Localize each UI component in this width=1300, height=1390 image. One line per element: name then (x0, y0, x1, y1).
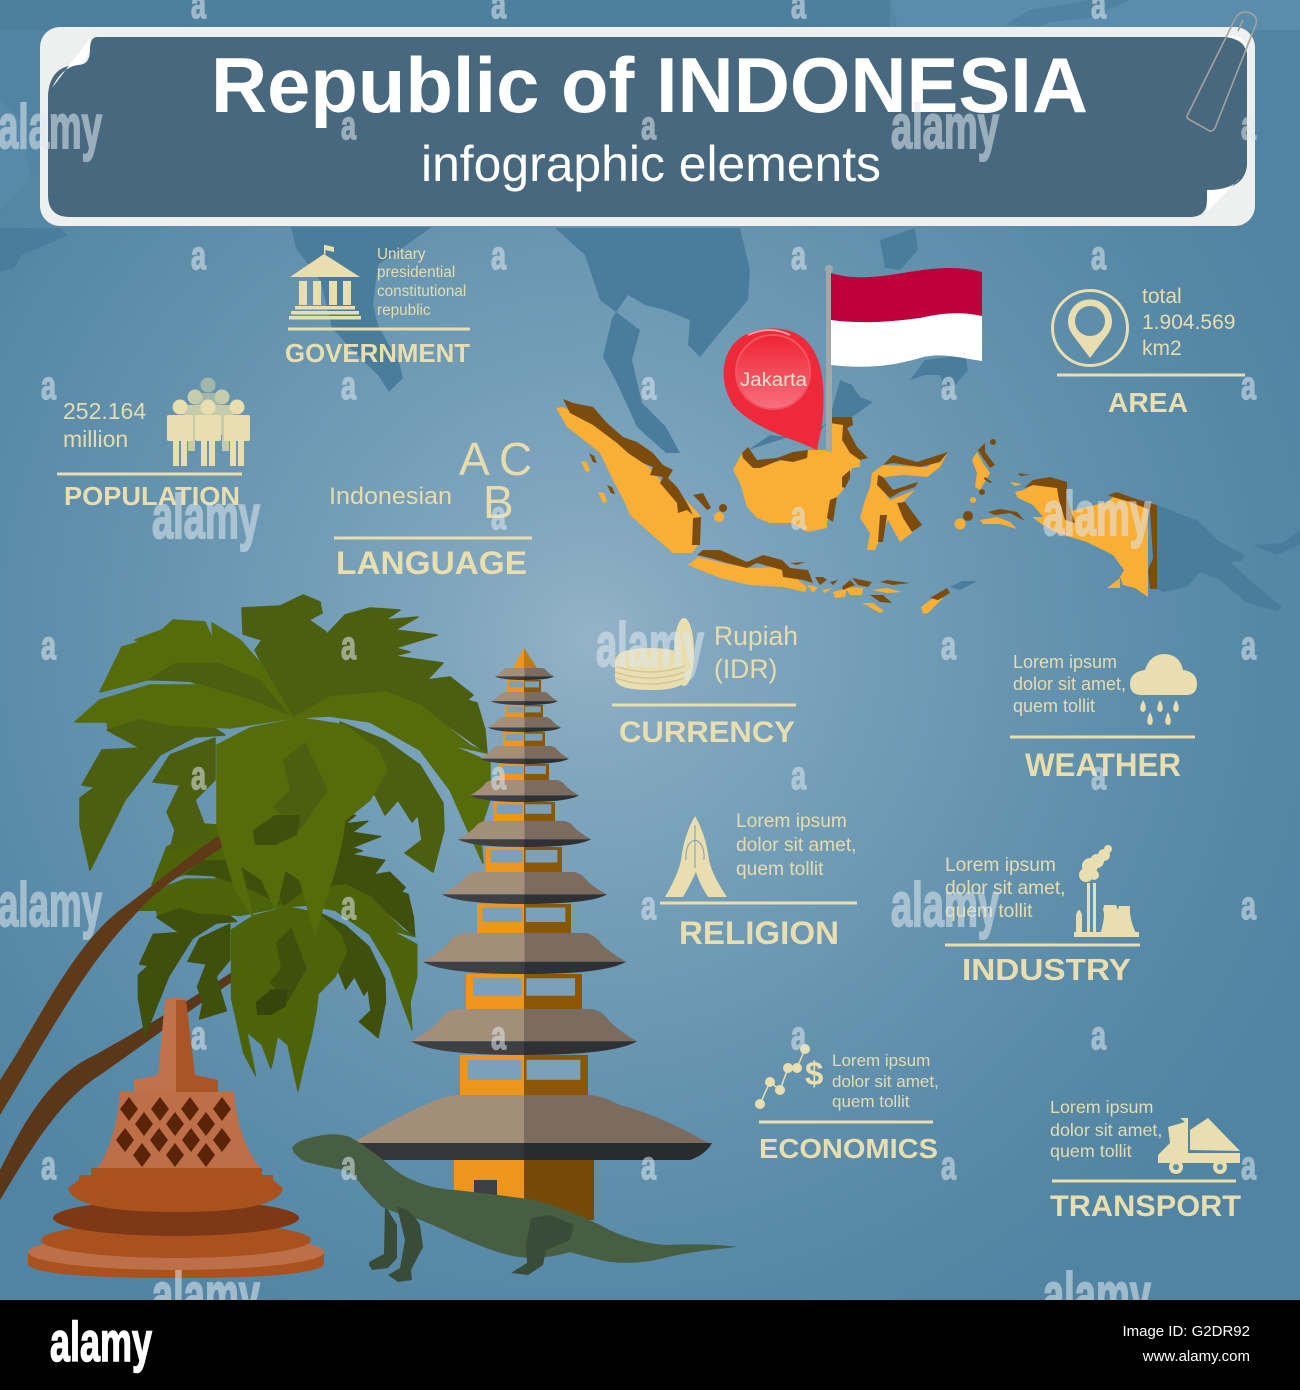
block: area (1052, 285, 1245, 418)
watermark pattern: a (341, 364, 357, 408)
block: language: B (483, 476, 514, 528)
block: religion: quem tollit (736, 859, 824, 880)
watermark pattern: alamy (891, 871, 999, 940)
watermark pattern: a (1091, 754, 1107, 798)
footer bar (0, 1300, 1300, 1390)
block: language: C (499, 433, 532, 485)
footer bar: www.alamy.com (1142, 1348, 1250, 1365)
icon: factory (1074, 845, 1139, 937)
watermark pattern: a (791, 1014, 807, 1058)
watermark pattern: a (191, 234, 207, 278)
subtitle: infographic elements (421, 136, 881, 192)
icon: people group (167, 378, 250, 466)
upper palm tree (0, 595, 490, 1115)
block: government: constitutional (377, 283, 466, 300)
icon: government building (289, 245, 361, 320)
icon: growth chart with dollar: $ (805, 1055, 823, 1092)
block: area: 1.904.569 (1142, 311, 1235, 334)
block: population (57, 378, 250, 511)
watermark pattern: a (191, 1014, 207, 1058)
header banner (40, 27, 1255, 226)
icon: paper clip (1187, 12, 1256, 131)
watermark pattern: a (791, 494, 807, 538)
block: government: Unitary (377, 246, 426, 263)
world map silhouettes (0, 0, 1300, 611)
watermark pattern: a (1241, 1144, 1257, 1188)
icon: dump truck (1158, 1118, 1240, 1174)
block: transport: TRANSPORT (1050, 1190, 1241, 1223)
watermark pattern: a (941, 624, 957, 668)
map of Indonesia (556, 399, 1157, 614)
watermark pattern: a (41, 624, 57, 668)
watermark pattern: a (341, 104, 357, 148)
block: currency: CURRENCY (619, 716, 795, 749)
block: economics: Lorem ipsum (832, 1051, 930, 1070)
block: language: A (459, 433, 490, 485)
watermark pattern: alamy (1043, 1261, 1151, 1330)
block: industry: INDUSTRY (962, 952, 1131, 987)
block: government: presidential (377, 264, 455, 281)
block: economics: dolor sit amet, (832, 1072, 939, 1091)
block: population: million (63, 426, 128, 452)
block: population: POPULATION (64, 481, 240, 511)
icon: rain cloud (1130, 654, 1197, 725)
watermark pattern: alamy (0, 93, 102, 162)
watermark pattern: a (41, 364, 57, 408)
watermark pattern: alamy (596, 611, 704, 680)
block: currency (612, 618, 798, 749)
watermark pattern: a (1241, 104, 1257, 148)
pin: Jakarta: Jakarta (740, 370, 807, 391)
icon: growth chart with dollar (755, 1044, 823, 1109)
watermark pattern: alamy (1043, 480, 1151, 549)
watermark pattern: a (341, 884, 357, 928)
watermark pattern: a (791, 234, 807, 278)
icon: praying hands (665, 816, 727, 897)
block: area: AREA (1108, 387, 1188, 418)
lower palm tree (0, 802, 417, 1200)
block: language (329, 433, 532, 581)
block: weather (1010, 652, 1197, 783)
footer logo: alamy (50, 1310, 152, 1373)
block: economics: quem tollit (832, 1092, 910, 1111)
flag of Indonesia (825, 265, 982, 452)
watermark pattern: a (641, 884, 657, 928)
stupa (28, 998, 324, 1278)
footer bar: Image ID: G2DR92 (1122, 1323, 1250, 1340)
watermark pattern: a (941, 1144, 957, 1188)
block: transport: Lorem ipsum (1050, 1097, 1153, 1117)
pin: Jakarta (724, 328, 824, 450)
watermark pattern: a (641, 104, 657, 148)
block: weather: Lorem ipsum (1013, 652, 1117, 672)
watermark pattern: a (491, 1014, 507, 1058)
block: industry: quem tollit (945, 901, 1033, 922)
block: religion: dolor sit amet, (736, 835, 857, 856)
block: industry: dolor sit amet, (945, 878, 1066, 899)
watermark pattern: a (491, 494, 507, 538)
watermark pattern: alamy (0, 871, 102, 940)
block: area: total (1142, 285, 1182, 308)
pagoda (349, 648, 712, 1220)
watermark pattern: a (491, 234, 507, 278)
block: transport: dolor sit amet, (1050, 1120, 1162, 1140)
block: transport (1050, 1097, 1241, 1223)
block: government: republic (377, 302, 431, 319)
watermark pattern: a (1091, 234, 1107, 278)
watermark pattern: a (341, 1144, 357, 1188)
watermark pattern: a (641, 1144, 657, 1188)
block: religion (660, 811, 857, 951)
block: industry: Lorem ipsum (945, 855, 1056, 876)
block: economics (755, 1044, 939, 1164)
watermark pattern: a (1091, 1014, 1107, 1058)
title: Republic of INDONESIA (211, 41, 1088, 129)
block: weather: dolor sit amet, (1013, 674, 1126, 694)
block: currency: (IDR) (714, 654, 777, 684)
watermark pattern: a (641, 364, 657, 408)
block: weather: quem tollit (1013, 696, 1095, 716)
watermark pattern: a (941, 364, 957, 408)
block: religion: RELIGION (679, 915, 839, 951)
watermark pattern: a (191, 754, 207, 798)
block: industry (945, 845, 1140, 987)
block: language: LANGUAGE (336, 545, 527, 581)
block: area: km2 (1142, 337, 1182, 360)
block: weather: WEATHER (1025, 747, 1181, 783)
watermark pattern: alamy (891, 93, 999, 162)
icon: coins (615, 618, 694, 690)
block: economics: ECONOMICS (759, 1133, 938, 1164)
watermark pattern: a (41, 1144, 57, 1188)
watermark pattern: alamy (152, 1261, 260, 1330)
block: population: 252.164 (63, 398, 146, 424)
watermark pattern: a (341, 624, 357, 668)
block: government: GOVERNMENT (285, 338, 470, 368)
watermark pattern: a (1241, 884, 1257, 928)
icon: location pin in circle (1052, 290, 1128, 366)
block: transport: quem tollit (1050, 1141, 1132, 1161)
watermark pattern: a (1241, 624, 1257, 668)
watermark pattern: a (791, 754, 807, 798)
block: currency: Rupiah (714, 621, 798, 651)
komodo dragon (292, 1134, 738, 1282)
watermark pattern: alamy (152, 483, 260, 552)
block: government (285, 245, 470, 368)
watermark pattern: a (1241, 364, 1257, 408)
watermark pattern: a (491, 754, 507, 798)
block: language: Indonesian (329, 483, 452, 510)
block: religion: Lorem ipsum (736, 811, 847, 832)
